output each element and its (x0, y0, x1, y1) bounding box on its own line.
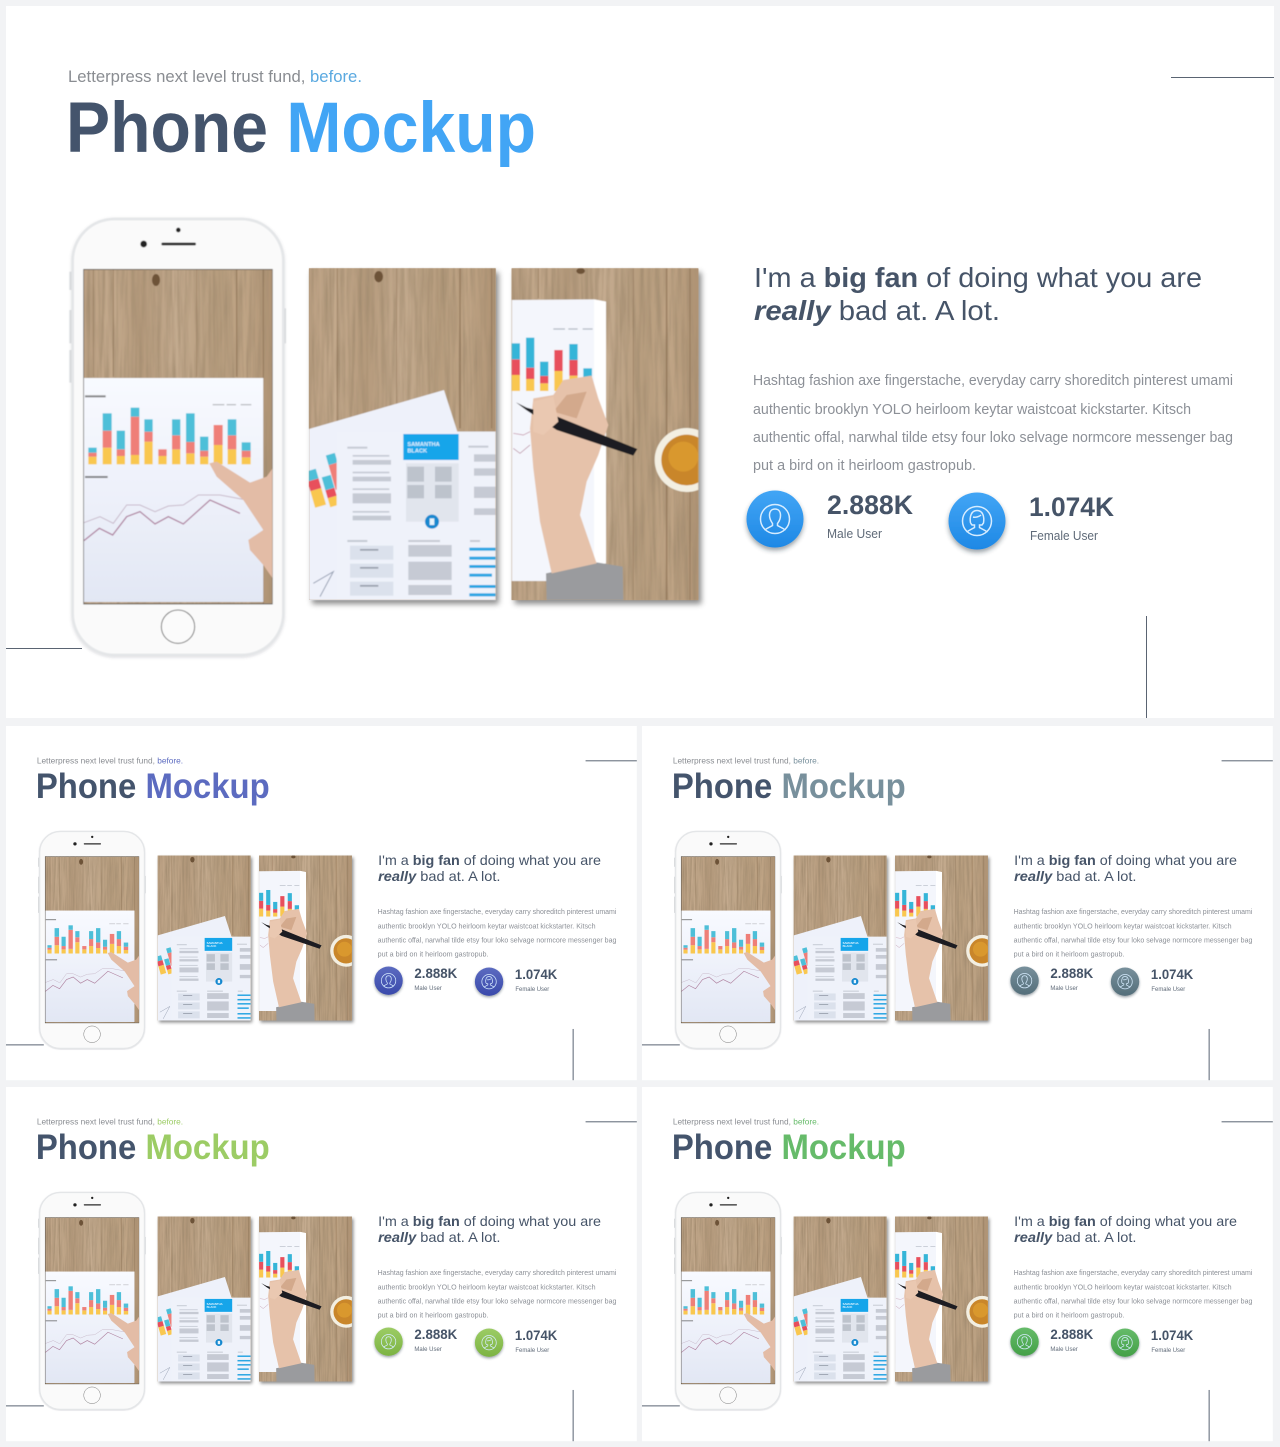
phone mockup (38, 1192, 146, 1409)
stat: male users (1050, 1327, 1094, 1353)
phone mockup (38, 831, 146, 1048)
stat: female users: 1.074K (1151, 1328, 1194, 1343)
body paragraph: authentic offal, narwhal tilde etsy four loko selvage normcore messenger bag (378, 935, 616, 944)
stat: male users (414, 966, 458, 992)
decorative corner line: top right (1222, 1120, 1273, 1123)
decorative corner line: bottom right (572, 1029, 575, 1080)
stat: male users: Male User (1050, 1346, 1079, 1353)
tagline: Letterpress next level trust fund, before. (673, 1116, 819, 1126)
photo: resume sheets on wood desk (154, 855, 251, 1021)
decorative corner line: top right (586, 1120, 637, 1123)
body paragraph (753, 373, 1233, 474)
body paragraph (1014, 907, 1253, 958)
stat: female users: Female User (1151, 986, 1186, 993)
headline text: really bad at. A lot. (378, 1229, 501, 1245)
icon: male user (1010, 967, 1039, 995)
stat: female users: Female User (515, 986, 550, 993)
icon: male user (374, 1328, 403, 1356)
headline text: I'm a big fan of doing what you are (378, 1213, 601, 1229)
body paragraph: Hashtag fashion axe fingerstache, everyday carry shoreditch pinterest umami (378, 907, 617, 916)
phone mockup (674, 1192, 782, 1409)
stat: male users (827, 490, 913, 541)
body paragraph: Hashtag fashion axe fingerstache, everyday carry shoreditch pinterest umami (1014, 1268, 1253, 1277)
headline text (378, 1213, 601, 1245)
body paragraph: authentic brooklyn YOLO heirloom keytar waistcoat kickstarter. Kitsch (1014, 921, 1232, 930)
photo: hand writing on chart with coffee (512, 268, 719, 600)
body paragraph (378, 1268, 617, 1319)
photo: hand writing on chart with coffee (895, 855, 998, 1021)
body paragraph: Hashtag fashion axe fingerstache, everyday carry shoreditch pinterest umami (753, 373, 1233, 389)
title: Phone Mockup (36, 1128, 270, 1167)
headline text: really bad at. A lot. (1014, 868, 1137, 884)
stat: female users: 1.074K (515, 1328, 558, 1343)
stat: female users: 1.074K (1151, 967, 1194, 982)
decorative corner line: bottom left (6, 1043, 44, 1046)
stat: female users: Female User (1030, 528, 1099, 543)
stat: female users (1151, 1328, 1194, 1354)
decorative corner line: bottom left (6, 1404, 44, 1407)
icon: female user (948, 492, 1006, 550)
photo: hand writing on chart with coffee (259, 1216, 362, 1382)
icon: female user (475, 968, 503, 996)
panel: purple variant slide (6, 726, 637, 1080)
headline text: really bad at. A lot. (1014, 1229, 1137, 1245)
stat: female users (1029, 492, 1114, 543)
stat: male users: Male User (414, 1346, 443, 1353)
headline text: really bad at. A lot. (378, 868, 501, 884)
body paragraph: authentic brooklyn YOLO heirloom keytar waistcoat kickstarter. Kitsch (378, 921, 596, 930)
stat: male users: 2.888K (827, 490, 913, 520)
body paragraph (378, 907, 617, 958)
stat: male users: 2.888K (414, 1327, 458, 1342)
tagline: Letterpress next level trust fund, before. (37, 1116, 183, 1126)
headline text (1014, 1213, 1237, 1245)
title: Phone Mockup (66, 89, 536, 168)
body paragraph: authentic brooklyn YOLO heirloom keytar waistcoat kickstarter. Kitsch (753, 402, 1191, 418)
stat: female users (515, 1328, 558, 1354)
icon: female user (475, 1329, 503, 1357)
headline text: I'm a big fan of doing what you are (754, 262, 1202, 293)
stat: male users (414, 1327, 458, 1353)
stat: male users: 2.888K (414, 966, 458, 981)
decorative corner line: bottom left (642, 1404, 680, 1407)
body paragraph (1014, 1268, 1253, 1319)
photo: resume sheets on wood desk (154, 1216, 251, 1382)
tagline: Letterpress next level trust fund, before. (673, 755, 819, 765)
photo: hand writing on chart with coffee (895, 1216, 998, 1382)
body paragraph: authentic brooklyn YOLO heirloom keytar waistcoat kickstarter. Kitsch (378, 1282, 596, 1291)
stat: male users: Male User (827, 526, 883, 541)
stat: female users: 1.074K (515, 967, 558, 982)
headline text (378, 852, 601, 884)
body paragraph: put a bird on it heirloom gastropub. (1014, 949, 1125, 958)
body paragraph: Hashtag fashion axe fingerstache, everyday carry shoreditch pinterest umami (1014, 907, 1253, 916)
stat: female users: Female User (515, 1347, 550, 1354)
decorative corner line: bottom right (572, 1390, 575, 1441)
stat: female users (1151, 967, 1194, 993)
stat: male users: 2.888K (1050, 1327, 1094, 1342)
tagline: Letterpress next level trust fund, before. (68, 67, 362, 86)
decorative corner line: top right (586, 759, 637, 762)
body paragraph: authentic offal, narwhal tilde etsy four loko selvage normcore messenger bag (378, 1296, 616, 1305)
headline text (1014, 852, 1237, 884)
panel: lime variant slide (6, 1087, 637, 1441)
stat: male users: 2.888K (1050, 966, 1094, 981)
photo: resume sheets on wood desk (790, 1216, 887, 1382)
body paragraph: authentic offal, narwhal tilde etsy four loko selvage normcore messenger bag (753, 430, 1233, 446)
body paragraph: authentic offal, narwhal tilde etsy four loko selvage normcore messenger bag (1014, 1296, 1252, 1305)
stat: female users: Female User (1151, 1347, 1186, 1354)
panel: green variant slide (642, 1087, 1273, 1441)
photo: hand writing on chart with coffee (259, 855, 362, 1021)
body paragraph: authentic brooklyn YOLO heirloom keytar waistcoat kickstarter. Kitsch (1014, 1282, 1232, 1291)
panel: slate variant slide (642, 726, 1273, 1080)
icon: male user (1010, 1328, 1039, 1356)
icon: male user (746, 490, 804, 548)
decorative corner line: top right (1222, 759, 1273, 762)
decorative corner line: bottom left (6, 648, 82, 649)
body paragraph: put a bird on it heirloom gastropub. (378, 949, 489, 958)
body paragraph: put a bird on it heirloom gastropub. (753, 458, 976, 474)
stat: male users (1050, 966, 1094, 992)
headline text: really bad at. A lot. (754, 295, 1000, 326)
headline text: I'm a big fan of doing what you are (1014, 852, 1237, 868)
title: Phone Mockup (36, 767, 270, 806)
body paragraph: put a bird on it heirloom gastropub. (1014, 1310, 1125, 1319)
body paragraph: authentic offal, narwhal tilde etsy four loko selvage normcore messenger bag (1014, 935, 1252, 944)
headline text (754, 262, 1202, 326)
icon: male user (374, 967, 403, 995)
decorative corner line: bottom right (1208, 1029, 1211, 1080)
body paragraph: put a bird on it heirloom gastropub. (378, 1310, 489, 1319)
icon: female user (1111, 968, 1139, 996)
decorative corner line: bottom right (1208, 1390, 1211, 1441)
panel: main blue slide (6, 6, 1274, 718)
icon: female user (1111, 1329, 1139, 1357)
title: Phone Mockup (672, 1128, 906, 1167)
photo: resume sheets on wood desk (302, 268, 496, 600)
headline text: I'm a big fan of doing what you are (1014, 1213, 1237, 1229)
decorative corner line: bottom left (642, 1043, 680, 1046)
phone mockup (69, 219, 286, 655)
photo: resume sheets on wood desk (790, 855, 887, 1021)
tagline: Letterpress next level trust fund, before. (37, 755, 183, 765)
headline text: I'm a big fan of doing what you are (378, 852, 601, 868)
title: Phone Mockup (672, 767, 906, 806)
phone mockup (674, 831, 782, 1048)
body paragraph: Hashtag fashion axe fingerstache, everyday carry shoreditch pinterest umami (378, 1268, 617, 1277)
stat: male users: Male User (414, 985, 443, 992)
decorative corner line: top right (1171, 77, 1274, 78)
stat: female users: 1.074K (1029, 492, 1114, 522)
decorative corner line: bottom right (1146, 616, 1147, 718)
stat: male users: Male User (1050, 985, 1079, 992)
stat: female users (515, 967, 558, 993)
